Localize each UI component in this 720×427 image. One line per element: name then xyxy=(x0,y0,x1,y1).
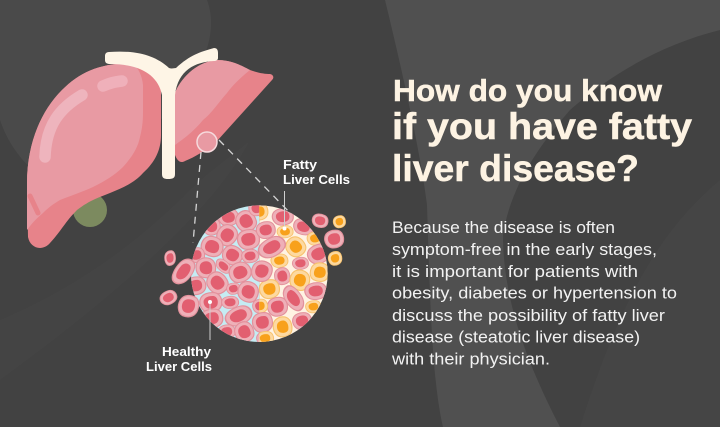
body text: with their physician. xyxy=(391,350,550,368)
callout: healthy liver cells: Healthy xyxy=(162,344,212,359)
title xyxy=(392,73,692,189)
title: if you have fatty xyxy=(392,105,692,147)
body text xyxy=(391,219,677,368)
body text: discuss the possibility of fatty liver xyxy=(392,307,666,325)
callout: healthy liver cells: Liver Cells xyxy=(146,359,212,374)
dashed zoom lines xyxy=(193,140,296,243)
title: How do you know xyxy=(393,73,663,108)
icon: gallbladder xyxy=(73,193,107,227)
healthy side background xyxy=(190,203,259,345)
liver ligament xyxy=(105,48,218,179)
body text: obesity, diabetes or hypertension to xyxy=(392,284,677,302)
cells overlapping the boundary xyxy=(248,201,288,345)
body text: Because the disease is often xyxy=(392,219,615,237)
body text: it is important for patients with xyxy=(392,263,638,281)
body text: disease (steatotic liver disease) xyxy=(392,328,640,346)
healthy side cells xyxy=(191,210,260,342)
callout: fatty liver cells xyxy=(282,157,350,230)
liver highlights xyxy=(45,95,82,157)
callout: fatty liver cells: Liver Cells xyxy=(283,172,350,187)
callout: healthy liver cells xyxy=(146,300,212,374)
illustration: liver xyxy=(27,48,273,248)
fatty side background xyxy=(259,203,329,345)
liver right lobe xyxy=(175,60,273,162)
liver left lobe xyxy=(27,63,161,248)
cells outside circle xyxy=(158,212,346,320)
body text: symptom-free in the early stages, xyxy=(392,241,657,259)
magnifier circle xyxy=(197,132,217,152)
title: liver disease? xyxy=(392,147,639,189)
callout: fatty liver cells: Fatty xyxy=(283,157,318,172)
chart: liver cell magnified circle xyxy=(158,201,346,345)
fatty side cells xyxy=(259,208,332,337)
